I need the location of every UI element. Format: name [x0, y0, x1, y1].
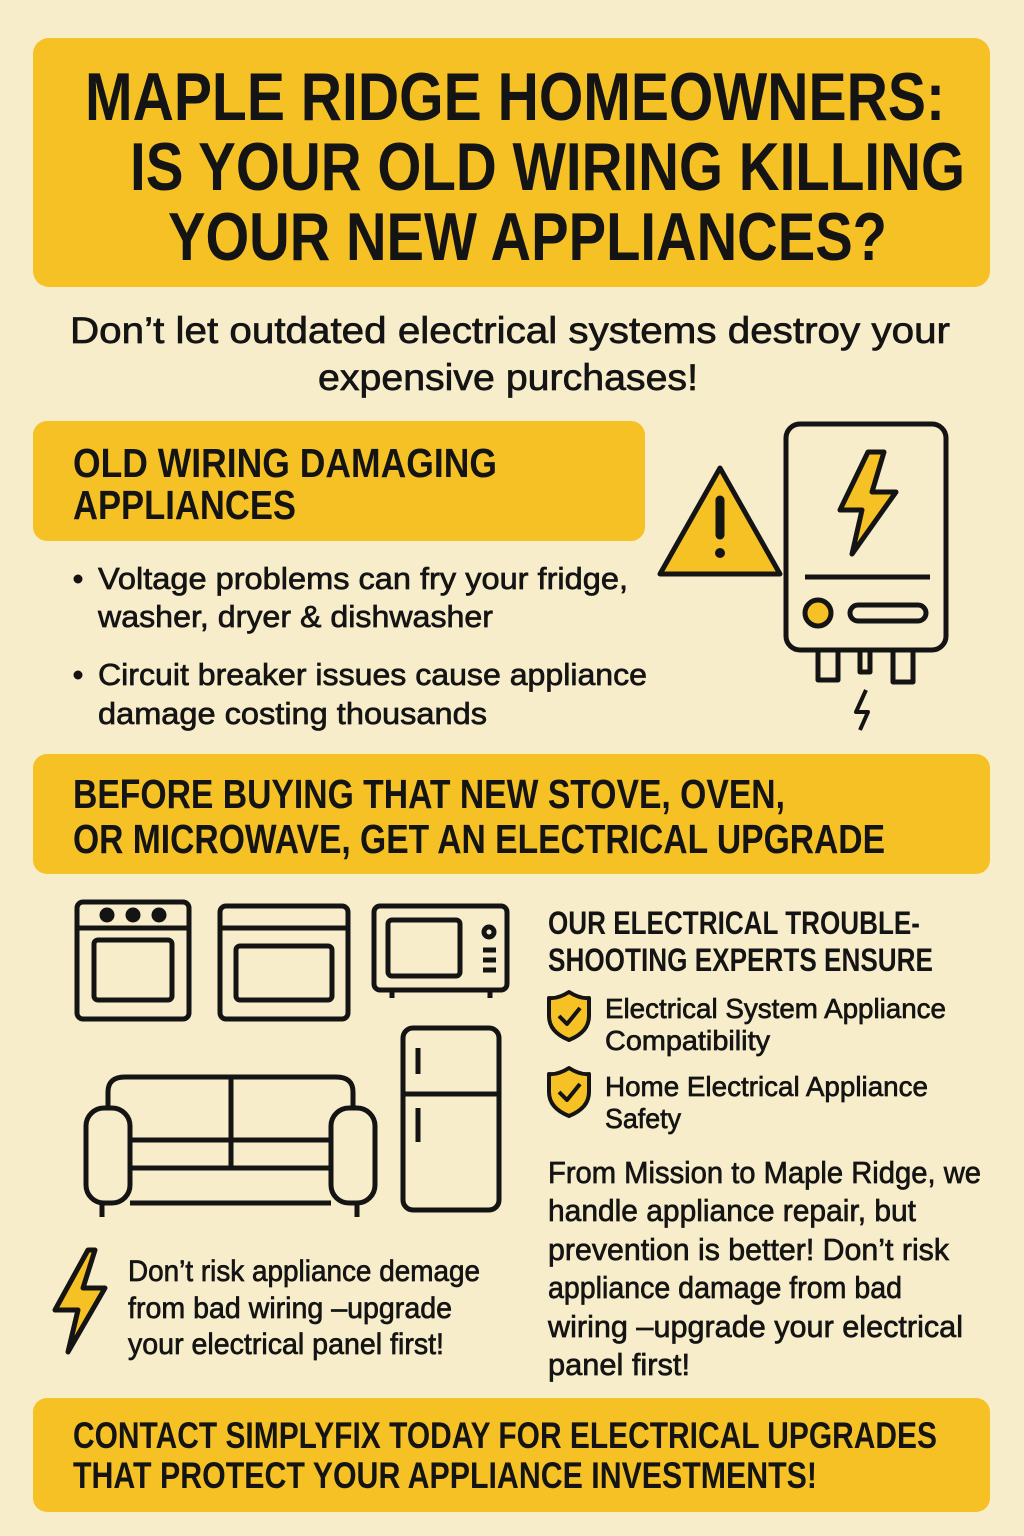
text block: prevention paragraph: wiring –upgrade your electrical [547, 1309, 963, 1344]
section heading: old wiring damaging appliances [33, 421, 645, 541]
callout: don't risk: from bad wiring –upgrade [128, 1292, 452, 1325]
footer call to action: THAT PROTECT YOUR APPLIANCE INVESTMENTS! [73, 1455, 817, 1496]
icon: shield check [549, 992, 589, 1040]
heading: experts ensure: SHOOTING EXPERTS ENSURE [548, 942, 933, 978]
heading: experts ensure [548, 905, 933, 978]
subtitle: Don’t let outdated electrical systems destroy your [70, 310, 950, 351]
icon: shield check [549, 1068, 589, 1116]
section heading: old wiring damaging appliances: APPLIANCES [73, 482, 296, 528]
section heading: old wiring damaging appliances: OLD WIRING DAMAGING [73, 440, 497, 486]
title [85, 59, 965, 275]
checklist item: safety [549, 1068, 928, 1134]
bullet list: damage costing thousands [98, 696, 487, 731]
section heading: before buying: BEFORE BUYING THAT NEW STOVE, OVEN, [73, 771, 785, 817]
title: YOUR NEW APPLIANCES? [168, 199, 887, 275]
icon: oven [220, 906, 348, 1019]
checklist item: safety: Safety [605, 1103, 681, 1134]
checklist item: compatibility: Electrical System Appliance [605, 993, 946, 1024]
callout: don't risk: Don’t risk appliance demage [128, 1255, 480, 1288]
bullet list [74, 561, 647, 731]
bullet list: Circuit breaker issues cause appliance [98, 657, 647, 692]
section heading: before buying [33, 754, 990, 874]
text block: prevention paragraph [547, 1155, 981, 1382]
checklist item: compatibility: Compatibility [605, 1025, 770, 1056]
subtitle [70, 310, 950, 398]
text block: prevention paragraph: handle appliance repair, but [548, 1193, 916, 1228]
checklist item: safety: Home Electrical Appliance [605, 1071, 928, 1102]
bullet list: Voltage problems can fry your fridge, [98, 561, 628, 596]
icon: microwave [374, 906, 507, 998]
text block: prevention paragraph: prevention is better! Don’t risk [548, 1232, 949, 1267]
icon: stove [77, 902, 189, 1019]
icon: lightning bolt [55, 1250, 105, 1352]
heading: experts ensure: OUR ELECTRICAL TROUBLE- [548, 905, 920, 941]
subtitle: expensive purchases! [318, 357, 698, 398]
callout: don't risk [128, 1255, 480, 1361]
text block: prevention paragraph: From Mission to Maple Ridge, we [548, 1155, 981, 1190]
icon: warning triangle [660, 468, 780, 574]
icon: fridge [403, 1028, 499, 1210]
callout: don't risk: your electrical panel first! [128, 1328, 444, 1361]
footer call to action [33, 1398, 990, 1512]
text block: prevention paragraph: panel first! [548, 1347, 690, 1382]
text block: prevention paragraph: appliance damage from bad [548, 1270, 902, 1305]
icon: electrical panel with bolt [786, 424, 946, 730]
icon: sofa [86, 1077, 375, 1217]
checklist item: compatibility [549, 992, 946, 1056]
title banner [33, 38, 990, 287]
bullet list: washer, dryer & dishwasher [97, 599, 493, 634]
